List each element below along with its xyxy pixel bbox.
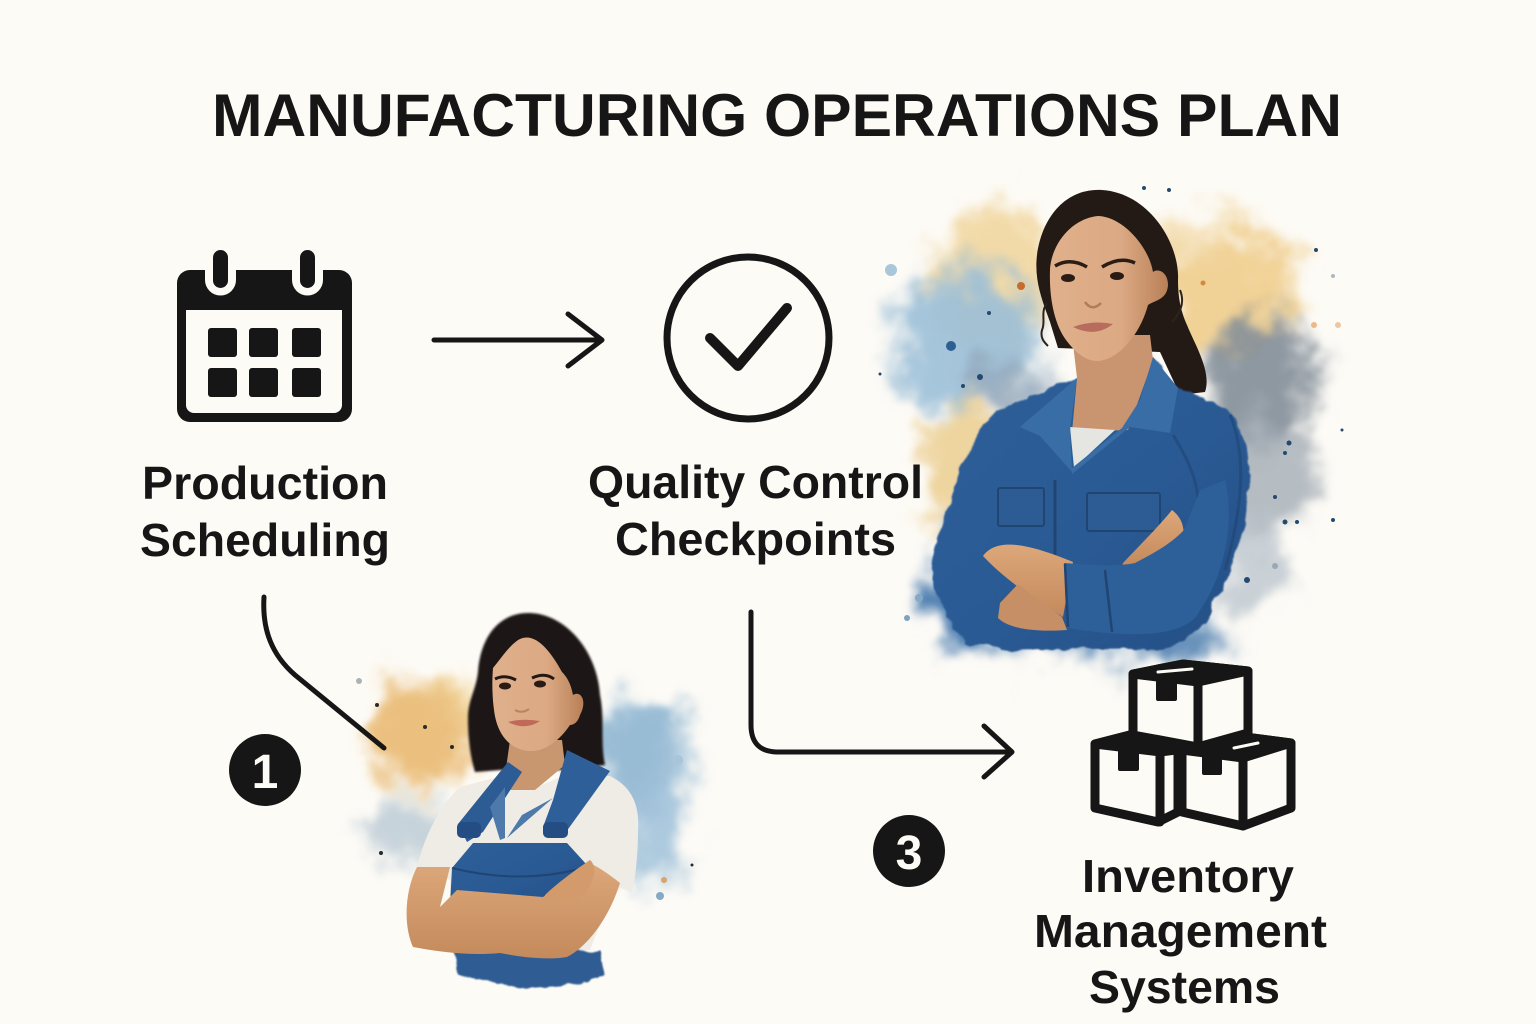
label: inventory management systems: Inventory [1082,850,1294,902]
label: quality control checkpoints: Quality Control [588,456,923,508]
badge: step 1: 1 [252,746,278,799]
title: MANUFACTURING OPERATIONS PLAN [212,82,1342,149]
label: production scheduling: Scheduling [140,514,390,566]
neck [503,740,565,790]
badge: step 3: 3 [896,827,922,880]
stray curls [1041,290,1182,346]
facial features [1055,260,1135,332]
hair [1036,190,1207,395]
crossed arms [407,860,620,958]
hair [468,613,605,772]
badge: step 1 [229,734,301,806]
badge: step 3 [873,815,945,887]
white t-shirt [417,775,638,950]
icon: check circle [667,257,829,419]
facial features [495,675,554,726]
arrow: quality control to inventory [751,612,1012,777]
blue work shirt [930,357,1248,650]
label: production scheduling [140,457,390,566]
label: inventory management systems: Management [1034,905,1327,957]
arrow: scheduling to quality control [434,314,602,366]
label: inventory management systems [1034,850,1327,1013]
connector: scheduling to step 1 [264,597,384,748]
denim overalls [450,750,610,905]
label: production scheduling: Production [142,457,388,509]
icon: stacked boxes [1095,664,1291,826]
icon: calendar [177,250,352,422]
label: quality control checkpoints [588,456,923,565]
neck [1072,335,1153,432]
shirt collar and pockets [998,357,1241,575]
white undershirt [1070,427,1115,468]
watercolor splash behind right worker [878,186,1344,657]
label: quality control checkpoints: Checkpoints [615,513,896,565]
face [492,637,583,751]
watercolor splash behind left worker [356,673,700,900]
top box [1133,664,1248,747]
label: inventory management systems: Systems [1089,961,1280,1013]
crossed arms [983,480,1229,634]
right box [1182,737,1291,826]
left box [1095,735,1178,822]
right worker portrait [930,190,1248,650]
face [1050,216,1168,361]
overalls hem wash [453,950,605,988]
left worker portrait [407,613,638,988]
